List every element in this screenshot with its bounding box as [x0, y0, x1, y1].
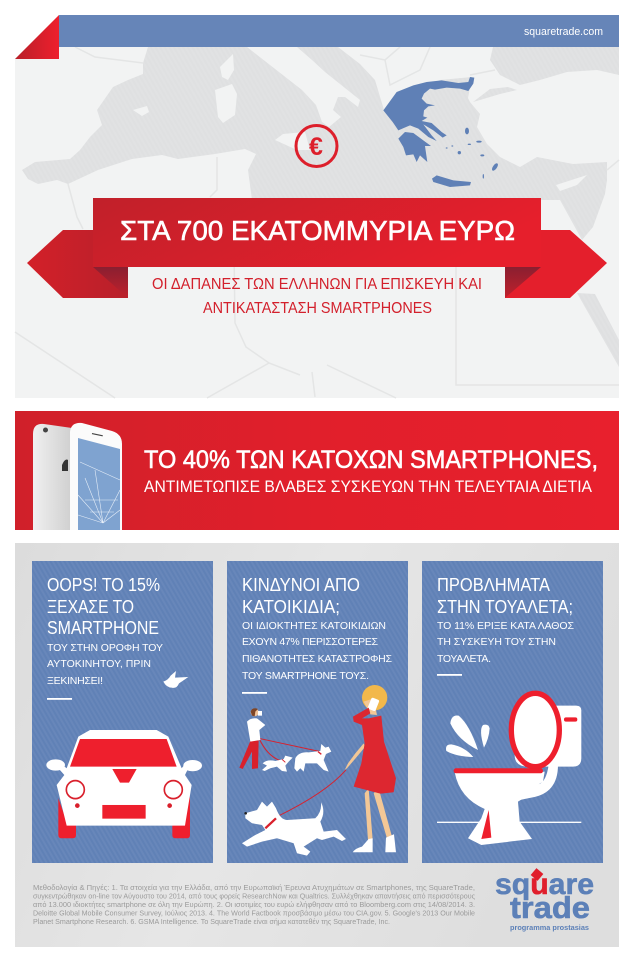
card 3 body — [437, 620, 574, 665]
text block: methodology and sources — [33, 883, 475, 926]
card 2 body: ΠΙΘΑΝΟΤΗΤΕΣ ΚΑΤΑΣΤΡΟΦΗΣ — [242, 653, 392, 665]
map: black sea and marmara — [473, 47, 619, 367]
card 1 body: ΤΟΥ ΣΤΗΝ ΟΡΟΦΗ ΤΟΥ — [47, 642, 163, 654]
text block: methodology and sources: από 13.000 ιδιοκτήτες smartphone σε όλη την Ευρώπη. 2. Οι ισοτιμίες του ευρώ ελήφθησαν από το Bloomberg.com στις 14/08/2014. 3. — [33, 900, 475, 909]
card 2 heading — [242, 575, 360, 617]
subtitle — [152, 276, 482, 317]
card 2 heading: ΚΙΝΔΥΝΟΙ ΑΠΟ — [242, 575, 360, 595]
band subheading: ΑΝΤΙΜΕΤΩΠΙΣΕ ΒΛΑΒΕΣ ΣΥΣΚΕΥΩΝ ΤΗΝ ΤΕΛΕΥΤΑΙΑ ΔΙΕΤΙΑ — [144, 477, 593, 496]
icon: bird — [163, 671, 188, 688]
card 2 body: ΕΧΟΥΝ 47% ΠΕΡΙΣΣΟΤΕΡΕΣ — [242, 636, 378, 648]
map: mediterranean sea — [22, 47, 607, 240]
icon: cracked smartphones — [33, 423, 122, 530]
text block: methodology and sources: Planet Smartphone Research. 6. GSMA Intelligence. Το SquareTrade είναι σήμα κατατεθέν της SquareTrade, Inc. — [33, 917, 390, 926]
panel: card forgotten on car roof — [32, 561, 213, 863]
ribbon title: ΣΤΑ 700 ΕΚΑΤΟΜΜΥΡΙΑ ΕΥΡΩ — [120, 215, 515, 246]
icon: toilet with splash — [437, 693, 581, 845]
text block: methodology and sources: συγκεντρώθηκαν on-line τον Αύγουστο του 2014, από τους φορείς ResearchNow και Qualtrics. Συλλέχθηκαν απαντήσεις από περισσότερους — [33, 892, 475, 900]
big dog — [242, 802, 346, 856]
band headline: ΤΟ 40% ΤΩΝ ΚΑΤΟΧΩΝ SMARTPHONES, — [144, 446, 598, 474]
subtitle: ΑΝΤΙΚΑΤΑΣΤΑΣΗ SMARTPHONES — [203, 300, 432, 317]
card 3 body: ΤΗ ΣΥΣΚΕΥΗ ΤΟΥ ΣΤΗΝ — [437, 636, 556, 648]
panel: map header — [15, 15, 619, 398]
card 2 body: ΟΙ ΙΔΙΟΚΤΗΤΕΣ ΚΑΤΟΙΚΙΔΙΩΝ — [242, 620, 386, 632]
icon: euro coin — [296, 126, 337, 166]
card 1 heading: ΞΕΧΑΣΕ ΤΟ — [47, 597, 134, 617]
card 2 heading: ΚΑΤΟΙΚΙΔΙΑ; — [242, 597, 340, 617]
panel: grey lower section — [15, 543, 619, 947]
card 3 heading: ΣΤΗΝ ΤΟΥΑΛΕΤΑ; — [437, 597, 573, 617]
red corner triangle — [15, 15, 59, 59]
card 1 body: ΞΕΚΙΝΗΣΕΙ! — [47, 675, 103, 687]
card 1 body: ΑΥΤΟΚΙΝΗΤΟΥ, ΠΡΙΝ — [47, 658, 151, 670]
card 2 body — [242, 620, 392, 682]
text block: methodology and sources: Μεθοδολογία & Πηγές: 1. Τα στοιχεία για την Ελλάδα, από την Ευρωπαϊκή Έρευνα Ατυχημάτων σε Smartphones, της SquareTrade, — [33, 883, 475, 892]
illustration: woman on phone walking dog — [242, 685, 396, 856]
map: borders — [15, 47, 619, 398]
header bar — [59, 15, 619, 47]
panel: card pets — [227, 561, 408, 863]
card 1 body — [47, 642, 163, 687]
text block: methodology and sources: Deloitte Global Mobile Consumer Survey, Ιούλιος 2013. 4. The World Factbook προσβάσιμο μέσω του CIA.gov. 5. Google's 2013 Our Mobile — [33, 908, 475, 918]
card 1 heading — [47, 575, 160, 638]
card 2 body: ΤΟΥ SMARTPHONE ΤΟΥΣ. — [242, 670, 369, 682]
icon: car — [46, 730, 202, 838]
logo: squaretrade — [495, 868, 594, 932]
website label: squaretrade.com — [524, 26, 603, 38]
map: greece — [383, 77, 499, 187]
card 1 heading: SMARTPHONE — [47, 618, 159, 638]
logo: squaretrade: trade — [510, 890, 590, 925]
card 1 heading: OOPS! ΤΟ 15% — [47, 575, 160, 595]
card 3 heading: ΠΡΟΒΛΗΜΑΤΑ — [437, 575, 550, 595]
card 3 body: ΤΟ 11% ΕΡΙΞΕ ΚΑΤΑ ΛΑΘΟΣ — [437, 620, 574, 632]
logo: squaretrade: programma prostasias — [510, 923, 589, 932]
logo: squaretrade: square — [495, 868, 594, 901]
panel: red band — [15, 411, 619, 530]
subtitle: ΟΙ ΔΑΠΑΝΕΣ ΤΩΝ ΕΛΛΗΝΩΝ ΓΙΑ ΕΠΙΣΚΕΥΗ ΚΑΙ — [152, 276, 482, 293]
ribbon banner — [27, 198, 607, 298]
icon: euro coin: € — [309, 133, 323, 161]
panel: card toilet — [422, 561, 603, 863]
illustration: man walking two dogs — [239, 708, 331, 772]
card 3 heading — [437, 575, 573, 617]
card 3 body: ΤΟΥΑΛΕΤΑ. — [437, 653, 491, 665]
